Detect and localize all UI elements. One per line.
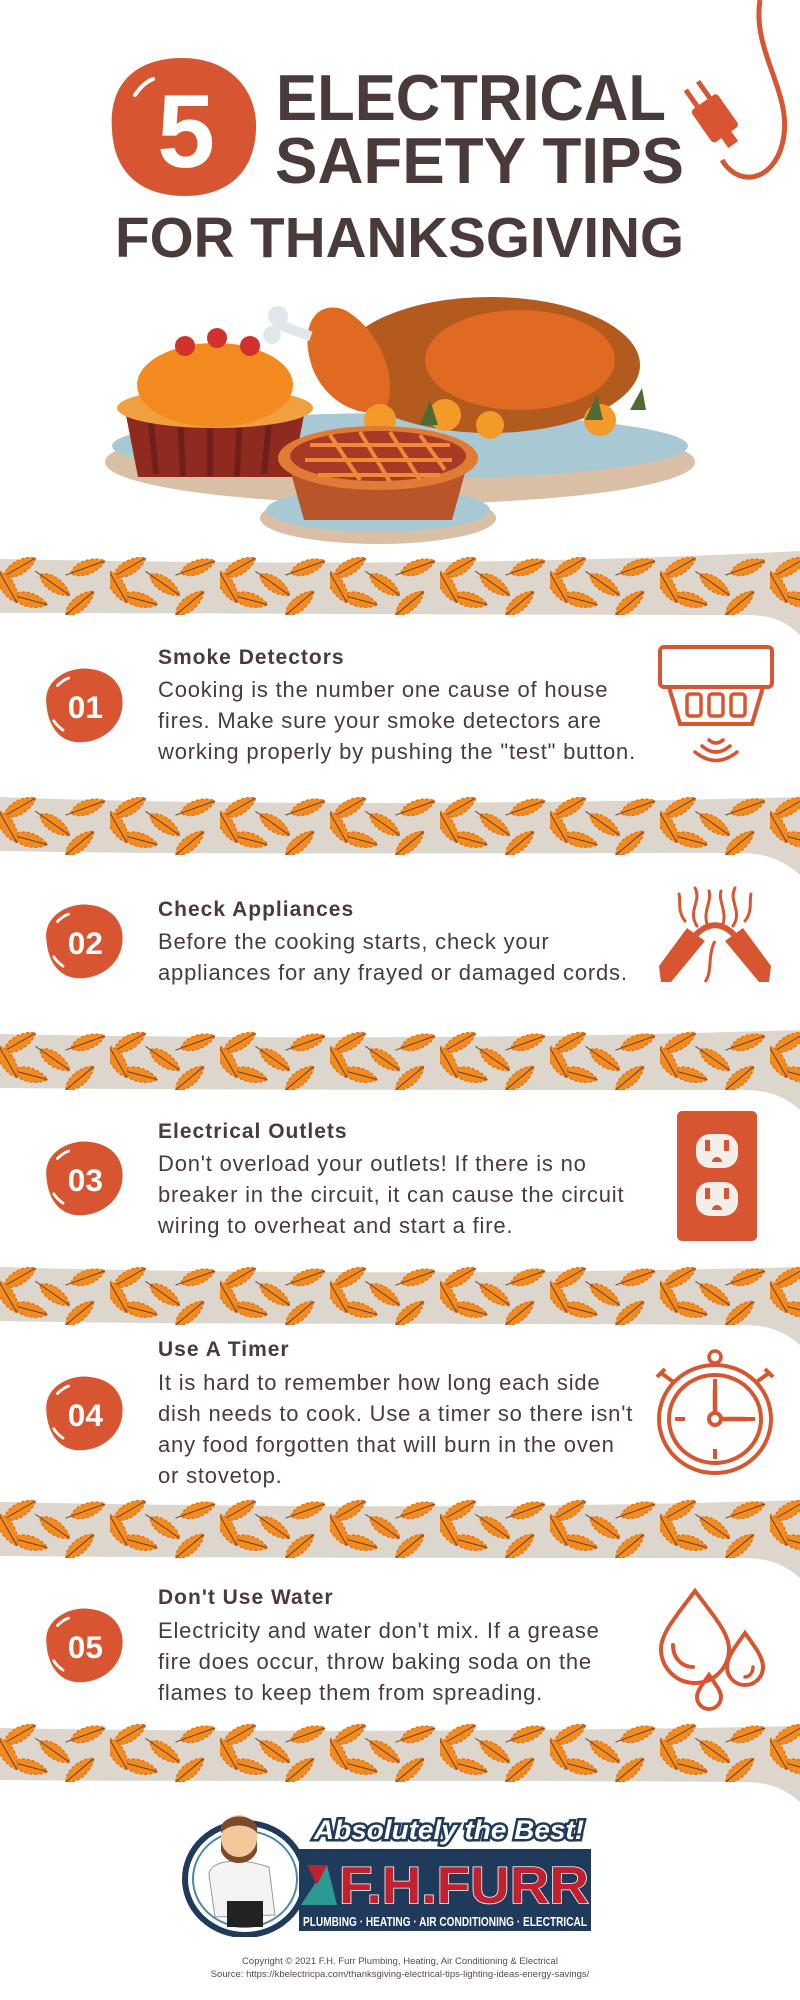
- text: working properly by pushing the "test" button.: [158, 739, 636, 764]
- number badge 05: [46, 1608, 123, 1682]
- number badge 02: 02: [68, 925, 103, 961]
- heading: Check Appliances: [158, 898, 354, 921]
- leaf band 6: [0, 1724, 800, 1802]
- icon: smoke detector: [658, 645, 774, 762]
- number badge 01: [46, 668, 123, 742]
- front pie: [260, 426, 496, 544]
- left pie: [117, 328, 313, 477]
- text: [158, 1151, 624, 1238]
- turkey: [263, 297, 646, 439]
- text: Don't overload your outlets! If there is no: [158, 1151, 587, 1176]
- text: wiring to overheat and start a fire.: [158, 1213, 513, 1238]
- icon: number 5 badge: [112, 58, 256, 196]
- text: fire does occur, throw baking soda on the: [158, 1649, 592, 1674]
- text: Electricity and water don't mix. If a grease: [158, 1618, 600, 1643]
- text: It is hard to remember how long each side: [158, 1370, 600, 1395]
- logo: F.H. Furr: [182, 1815, 591, 1937]
- heading text: FOR THANKSGIVING: [115, 206, 684, 270]
- text: dish needs to cook. Use a timer so there isn't: [158, 1401, 633, 1426]
- heading: Electrical Outlets: [158, 1120, 348, 1143]
- icon: number 5 badge: 5: [157, 74, 215, 190]
- text: fires. Make sure your smoke detectors are: [158, 708, 602, 733]
- heading text: SAFETY TIPS: [275, 124, 684, 197]
- text: Cooking is the number one cause of house: [158, 677, 608, 702]
- text: any food forgotten that will burn in the oven: [158, 1432, 615, 1457]
- tip 2: [46, 886, 771, 985]
- icon: water drops: [659, 1588, 765, 1711]
- leaf band 4: [0, 1266, 800, 1345]
- number badge 01: 01: [68, 689, 103, 725]
- number badge 03: [46, 1142, 123, 1216]
- text: flames to keep them from spreading.: [158, 1680, 543, 1705]
- text: [158, 677, 636, 764]
- icon: outlet: [677, 1111, 757, 1241]
- illustration: thanksgiving food: [105, 297, 695, 544]
- icon: frayed cords: [659, 886, 771, 983]
- copyright footer: [211, 1956, 590, 1980]
- text: slogan and brand: F.H.FURR: [339, 1857, 589, 1915]
- text: Before the cooking starts, check your: [158, 929, 550, 954]
- text: [158, 1618, 600, 1705]
- number badge 05: 05: [68, 1629, 103, 1665]
- text: or stovetop.: [158, 1463, 283, 1488]
- heading: Don't Use Water: [158, 1586, 334, 1609]
- number badge 04: 04: [68, 1397, 103, 1433]
- leaf band 3: [0, 1030, 800, 1110]
- text: appliances for any frayed or damaged cords.: [158, 960, 628, 985]
- text: slogan and brand: Absolutely the Best!: [313, 1815, 584, 1845]
- icon: plug and cord: [679, 0, 785, 177]
- icon: timer: [656, 1349, 774, 1475]
- tip 1: [46, 645, 774, 764]
- heading text: [115, 61, 684, 270]
- title: [112, 0, 788, 270]
- tip 5: [46, 1586, 765, 1711]
- number badge 04: [46, 1376, 123, 1450]
- icon: mascot badge: [185, 1815, 305, 1935]
- leaf band 2: [0, 796, 800, 875]
- heading text: ELECTRICAL: [276, 61, 666, 134]
- text: [158, 929, 628, 985]
- heading: Smoke Detectors: [158, 646, 345, 669]
- text: [158, 1370, 633, 1488]
- copyright footer: Source: https://kbelectricpa.com/thanksgiving-electrical-tips-lighting-ideas-energy-savings/: [211, 1969, 589, 1980]
- copyright footer: Copyright © 2021 F.H. Furr Plumbing, Heating, Air Conditioning & Electrical: [242, 1956, 558, 1967]
- number badge 03: 03: [68, 1162, 103, 1198]
- tip 4: [46, 1338, 774, 1488]
- number badge 02: [46, 904, 123, 978]
- leaf band 5: [0, 1500, 800, 1578]
- text: slogan and brand: [299, 1815, 591, 1931]
- tip 3: [46, 1111, 757, 1241]
- leaf band 1: [0, 551, 800, 635]
- heading: Use A Timer: [158, 1338, 290, 1361]
- text: breaker in the circuit, it can cause the circuit: [158, 1182, 624, 1207]
